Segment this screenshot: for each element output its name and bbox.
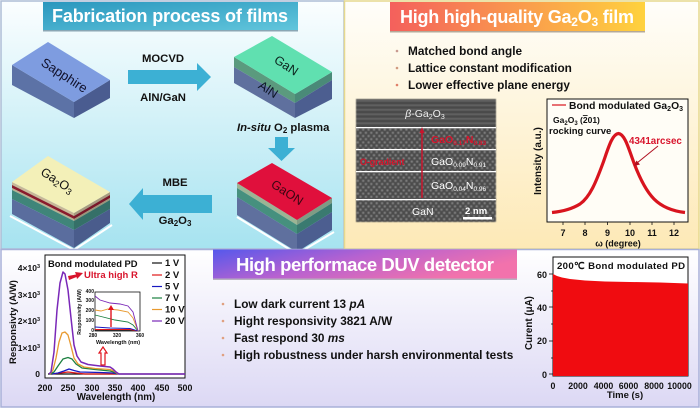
inset chart: 280-360 nm: 320: [113, 333, 121, 339]
inset chart: 280-360 nm: Wavelength (nm): [96, 340, 140, 346]
inset chart: 280-360 nm: [77, 289, 144, 346]
label: Ga2O3 source: Ga: [159, 215, 174, 227]
image: TEM lattice micrograph: 3: [441, 114, 445, 121]
image: TEM lattice micrograph: β-Ga: [405, 108, 429, 120]
block: Ga2O3 film stack: Ga: [38, 165, 60, 186]
annotation: crystal plane: 2: [564, 121, 568, 127]
annotation: FWHM value: 4341arcsec: [629, 136, 682, 147]
y ticks: [549, 274, 553, 374]
bullet list: detector metrics: Hight responsivity 3821 A/W: [234, 314, 393, 328]
y tick labels: 3: [37, 317, 40, 323]
arrow: MBE: [129, 188, 212, 220]
x tick labels: 8000: [644, 381, 664, 391]
y tick labels: 40: [537, 303, 547, 313]
x tick labels: 11: [647, 228, 657, 238]
image: TEM lattice micrograph: O: [433, 108, 441, 120]
y tick labels: 0: [542, 370, 547, 380]
x tick labels: 200: [38, 383, 52, 393]
heading: high-quality film: 3: [591, 15, 598, 29]
heading: high-quality film: High high-quality Ga: [400, 7, 572, 27]
x tick labels: 500: [178, 383, 192, 393]
arrow: peak pointer: [68, 272, 83, 280]
heading: DUV detector: High performace DUV detector: [236, 254, 494, 275]
bullet list: film properties: [396, 44, 572, 92]
x tick labels: 0: [551, 381, 556, 391]
block: Ga2O3 film stack: O: [56, 177, 72, 194]
inset chart: 280-360 nm: 300: [86, 298, 94, 304]
x tick labels: 450: [155, 383, 169, 393]
image: TEM lattice micrograph: 0.83: [473, 140, 486, 147]
image: TEM lattice micrograph: GaN: [412, 206, 434, 218]
heading: fabrication process: Fabrication process of films: [52, 6, 288, 26]
bullet list: detector metrics: High robustness under harsh environmental tests: [234, 348, 514, 362]
inset chart: 280-360 nm: 360: [136, 333, 144, 339]
x tick labels: 7: [560, 228, 566, 238]
chart: responsivity spectra: [8, 255, 192, 403]
bullet list: film properties: Lattice constant modification: [408, 61, 572, 75]
y axis title: Intensity (a.u.): [533, 127, 544, 195]
panel: high performance DUV detector: [1, 250, 699, 407]
inset chart: 280-360 nm: 280: [89, 333, 97, 339]
label: ultra high R: Ultra high R: [84, 270, 138, 281]
y tick labels: 60: [537, 270, 547, 280]
image: TEM lattice micrograph: N: [466, 156, 473, 168]
block: Ga2O3 film stack: 3: [64, 186, 74, 197]
x tick labels: 250: [61, 383, 75, 393]
bullet list: detector metrics: Fast respond 30 ms: [234, 331, 345, 345]
heading: high-quality film: film: [598, 7, 634, 27]
label: MOCVD: MOCVD: [142, 53, 184, 65]
x tick labels: 400: [131, 383, 145, 393]
heading: high-quality film: O: [578, 7, 592, 27]
legend: bias voltages: [152, 258, 185, 327]
annotation: rocking curve: rocking curve: [549, 126, 611, 137]
image: TEM lattice micrograph: 2 nm: [465, 206, 487, 217]
legend: bond modulated: [552, 101, 683, 113]
label: Ga2O3 source: 2: [174, 219, 179, 228]
legend: bond modulated: O: [671, 101, 679, 112]
axis ticks: [563, 222, 674, 225]
rocking curve line: [552, 134, 685, 212]
inset chart: 280-360 nm: 400: [86, 289, 94, 295]
block: GaON: GaON: [269, 177, 306, 208]
x tick labels: 9: [605, 228, 610, 238]
label: in-situ O2 plasma: plasma: [287, 122, 330, 134]
x tick labels: 300: [85, 383, 99, 393]
inset chart: 280-360 nm: 200: [86, 308, 94, 314]
legend: bias voltages: 1 V: [165, 258, 180, 269]
block: GaON: [237, 163, 334, 254]
image: TEM lattice micrograph: 0.91: [473, 162, 486, 169]
x tick labels: 2000: [568, 381, 588, 391]
arrow: MOCVD: [128, 63, 211, 91]
x tick labels: 4000: [594, 381, 613, 391]
x axis title: Wavelength (nm): [77, 392, 155, 403]
annotation: crystal plane: (: [578, 115, 583, 125]
image: TEM lattice micrograph: 0.09: [453, 162, 466, 169]
current area fill: [553, 274, 688, 376]
x axis title: Time (s): [607, 390, 643, 401]
image: TEM lattice micrograph: N: [466, 180, 473, 192]
legend: bias voltages: 7 V: [165, 293, 180, 304]
image: TEM lattice micrograph: 2: [429, 114, 433, 121]
y axis title: Curent (μA): [524, 296, 535, 350]
x tick labels: 10000: [667, 381, 692, 391]
inset chart: 280-360 nm: 0: [91, 328, 94, 334]
label: condition: 200℃ Bond modulated PD: [557, 261, 685, 272]
label: Ga2O3 source: 3: [187, 219, 192, 228]
inset chart: 280-360 nm: Responsivity (A/W): [77, 289, 83, 335]
legend: bias voltages: 2 V: [165, 270, 180, 281]
bullet list: detector metrics: [222, 297, 514, 362]
annotation: crystal plane: 201): [583, 115, 600, 125]
x tick labels: [560, 228, 679, 238]
chart: current stability at 200 C: [524, 257, 692, 401]
label: Ga2O3 source: O: [178, 215, 187, 227]
arrow: FWHM pointer: [634, 146, 658, 166]
y tick labels: 3: [37, 291, 40, 297]
x tick labels: [38, 383, 192, 393]
label: chart title: Bond modulated PD: [48, 258, 138, 269]
block: sapphire: Sapphire: [39, 55, 90, 96]
label: in-situ O2 plasma: In-situ O: [237, 122, 283, 134]
y tick labels: 20: [537, 336, 547, 346]
chart: rocking curve: [533, 99, 688, 248]
legend: bond modulated: 3: [679, 106, 683, 113]
image: TEM lattice micrograph: GaO: [431, 156, 453, 168]
heading: fabrication process: [43, 2, 298, 32]
block: GaN on AlN: AlN: [256, 78, 280, 101]
block: GaN on AlN: GaN: [272, 53, 301, 79]
image: TEM lattice micrograph: [356, 99, 496, 222]
y tick labels: 4×10: [18, 263, 37, 273]
y tick labels: 0: [35, 369, 40, 379]
x tick labels: 10: [625, 228, 635, 238]
annotation: crystal plane: Ga: [553, 115, 564, 125]
image: TEM lattice micrograph: 0.04: [453, 186, 466, 193]
legend: bond modulated: 2: [667, 106, 671, 113]
arrow: zoom to inset: [99, 347, 107, 365]
legend: bias voltages: 10 V: [165, 304, 185, 316]
heading: DUV detector: [213, 250, 517, 280]
arrow: O2 plasma step: [268, 137, 295, 161]
spectra curves: [48, 272, 185, 374]
x tick labels: 12: [669, 228, 679, 238]
annotation: crystal plane: O: [568, 115, 575, 125]
panel: high-quality Ga2O3 film: [344, 1, 699, 249]
x tick labels: 8: [582, 228, 588, 238]
x axis title: ω (degree): [595, 238, 641, 248]
image: TEM lattice micrograph: GaO: [431, 180, 453, 192]
x tick labels: 350: [108, 383, 122, 393]
label: in-situ O2 plasma: 2: [283, 126, 288, 135]
image: TEM lattice micrograph: N: [466, 134, 473, 146]
block: GaN on AlN: [234, 36, 332, 118]
x tick labels: [551, 381, 692, 391]
image: TEM lattice micrograph: 0.96: [473, 186, 486, 193]
y axis title: Responsivty (A/W): [8, 280, 19, 364]
heading: high-quality film: 2: [571, 15, 578, 29]
y tick labels: 2×10: [18, 316, 37, 326]
image: TEM lattice micrograph: GaO: [431, 134, 453, 146]
y tick labels: 1×10: [18, 343, 37, 353]
label: MBE: MBE: [162, 177, 188, 189]
image: TEM lattice micrograph: O-gradient: [360, 157, 405, 167]
legend: bias voltages: 20 V: [165, 316, 185, 327]
y tick labels: [537, 270, 547, 380]
annotation: crystal plane: 3: [574, 121, 578, 127]
block: Ga2O3 film stack: [10, 156, 112, 250]
legend: bond modulated: Bond modulated Ga: [569, 101, 667, 112]
inset chart: 280-360 nm: 100: [86, 318, 94, 324]
x tick labels: 6000: [619, 381, 638, 391]
panel: fabrication process of films: [1, 1, 344, 254]
block: sapphire: [12, 42, 110, 118]
bullet list: detector metrics: Low dark current 13 pA: [234, 297, 365, 311]
heading: high-quality film: [390, 2, 645, 32]
y tick labels: [18, 263, 40, 379]
y tick labels: 3: [37, 264, 40, 270]
y tick labels: 3: [37, 344, 40, 350]
bullet list: film properties: Lower effective plane energy: [408, 78, 570, 92]
bullet list: film properties: Matched bond angle: [408, 44, 522, 58]
label: AlN/GaN: AlN/GaN: [140, 92, 186, 104]
y tick labels: 3×10: [18, 290, 37, 300]
image: TEM lattice micrograph: 0.17: [453, 140, 466, 147]
block: Ga2O3 film stack: 2: [52, 178, 61, 189]
legend: bias voltages: 5 V: [165, 282, 180, 292]
